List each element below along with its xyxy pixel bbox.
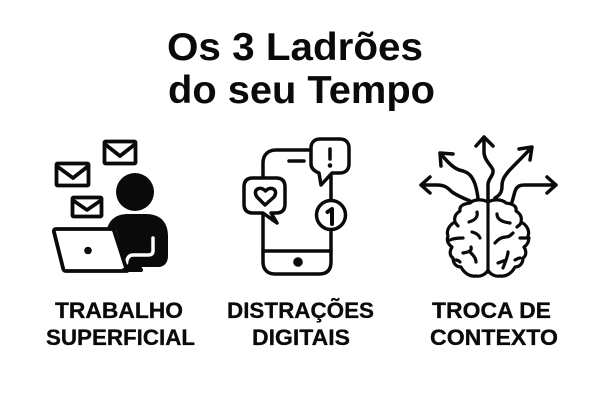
icon: phone with notifications bbox=[244, 139, 349, 274]
label: distrações digitais bbox=[227, 298, 374, 350]
label: troca de contexto: TROCA DE bbox=[432, 298, 551, 323]
label: troca de contexto: CONTEXTO bbox=[430, 325, 558, 350]
panel: trabalho superficial bbox=[46, 142, 195, 350]
label: trabalho superficial: SUPERFICIAL bbox=[46, 325, 195, 350]
icon: number badge bbox=[316, 200, 346, 230]
arrows bbox=[421, 137, 556, 202]
icon: envelope left bbox=[56, 164, 88, 186]
icon: brain outline bbox=[447, 198, 529, 276]
title bbox=[167, 26, 435, 112]
panel: troca de contexto bbox=[421, 137, 558, 350]
label: trabalho superficial bbox=[46, 298, 195, 350]
label: distrações digitais: DIGITAIS bbox=[252, 325, 350, 350]
icon: laptop bbox=[54, 229, 127, 271]
panel: distrações digitais bbox=[227, 139, 374, 350]
icon: person bbox=[107, 173, 168, 272]
title: do seu Tempo bbox=[168, 69, 435, 112]
icon: phone body bbox=[263, 150, 331, 274]
icon: person at laptop with envelopes bbox=[54, 142, 168, 272]
title: Os 3 Ladrões bbox=[167, 26, 423, 69]
icon: brain with arrows bbox=[421, 137, 556, 276]
label: trabalho superficial: TRABALHO bbox=[55, 298, 183, 323]
icon: envelope top bbox=[104, 142, 136, 164]
icon: exclamation bubble bbox=[311, 139, 349, 185]
label: troca de contexto bbox=[430, 298, 558, 350]
label: distrações digitais: DISTRAÇÕES bbox=[227, 298, 374, 323]
icon: envelope lower bbox=[72, 198, 102, 216]
icon: heart bubble bbox=[244, 178, 285, 223]
